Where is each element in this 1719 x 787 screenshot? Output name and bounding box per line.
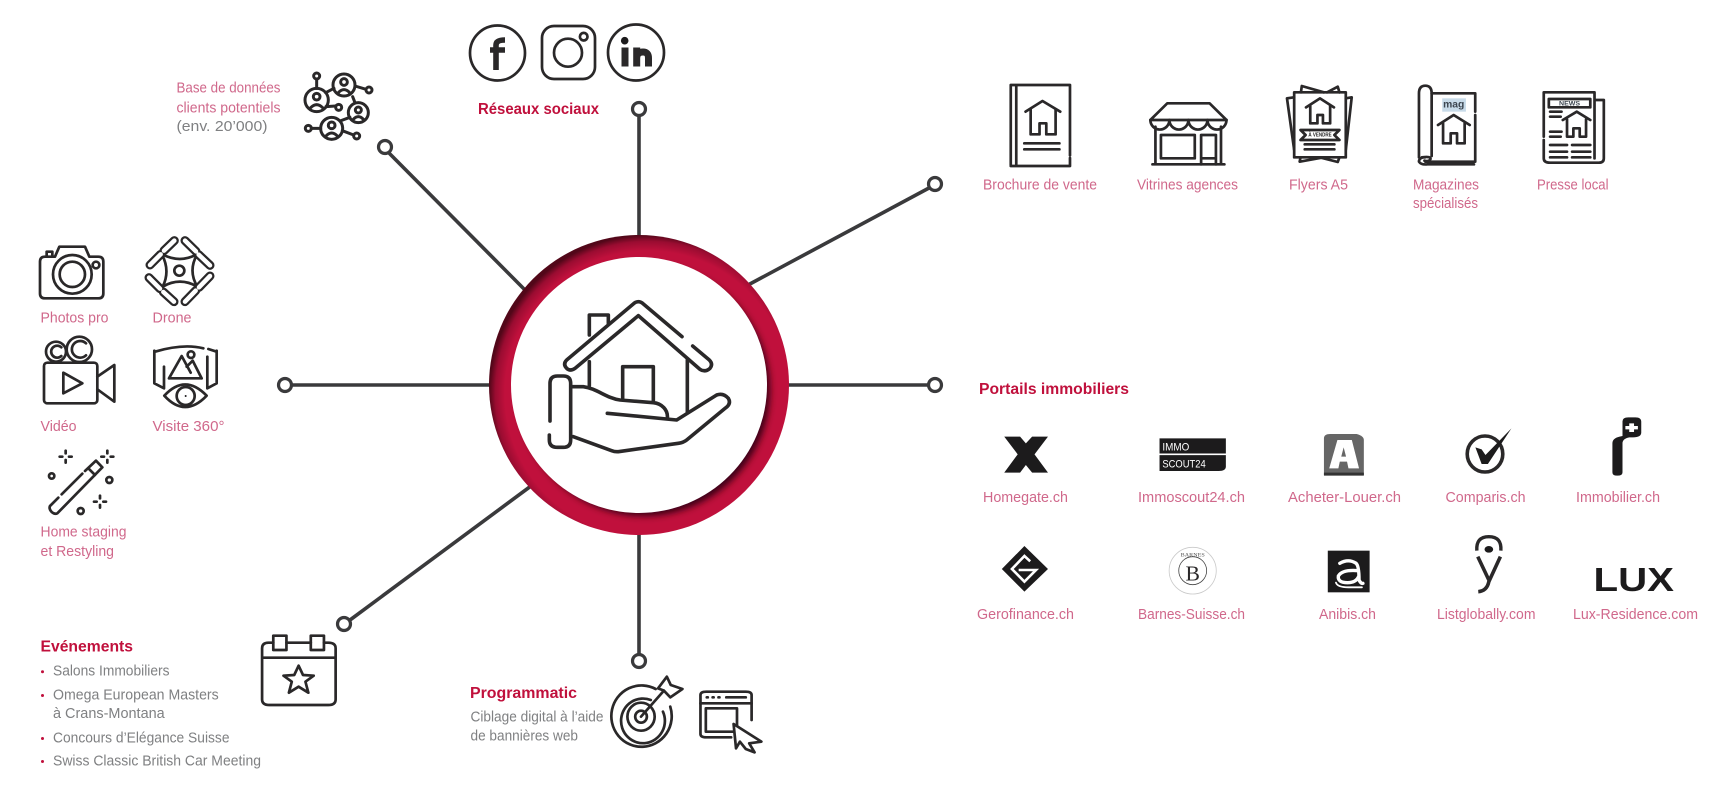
connector end dots	[278, 102, 942, 668]
label: magazines: Magazines	[1413, 178, 1479, 194]
icon: facebook	[470, 26, 525, 80]
connector lines	[292, 115, 929, 654]
list: événements: Omega European Masters	[53, 687, 219, 703]
label: homegate: Homegate.ch	[983, 490, 1068, 506]
logo: listglobally	[1477, 537, 1501, 592]
logo: barnes: B	[1185, 561, 1200, 585]
panel: base de données	[176, 73, 372, 139]
panel: événements	[40, 636, 336, 770]
icon: presse	[1544, 92, 1604, 163]
icon: target with arrow	[611, 677, 682, 747]
heading: programmatic: Programmatic	[470, 685, 577, 702]
text: base de données: (env. 20’000)	[176, 119, 268, 135]
icon: video	[44, 337, 114, 403]
label: acheter-louer: Acheter-Louer.ch	[1288, 490, 1401, 506]
panel: visuels	[40, 241, 224, 560]
label: vitrines: Vitrines agences	[1137, 178, 1238, 194]
icon: house in hand	[549, 302, 729, 452]
logo: barnes: BARNES	[1181, 553, 1205, 558]
label: photos: Photos pro	[40, 311, 108, 327]
label: immoscout24: Immoscout24.ch	[1138, 490, 1245, 506]
label: magazines	[1413, 178, 1479, 212]
label: video: Vidéo	[40, 419, 76, 435]
text: programmatic description: Ciblage digital à l’aide	[470, 710, 604, 726]
logo: anibis	[1328, 551, 1370, 592]
icon: magic wand	[49, 451, 113, 514]
text: base de données: clients potentiels	[176, 101, 280, 117]
icon: magazine: mag	[1443, 100, 1464, 110]
icon: flyers: À VENDRE	[1308, 132, 1332, 138]
panel: programmatic	[470, 677, 761, 752]
text: base de données	[176, 81, 280, 135]
list: événements: Swiss Classic British Car Meeting	[53, 754, 261, 770]
logo: immoscout24: SCOUT24	[1162, 458, 1206, 470]
icon: camera	[40, 247, 103, 298]
label: flyers: Flyers A5	[1289, 178, 1348, 194]
label: anibis: Anibis.ch	[1319, 607, 1376, 623]
list: événements: Concours d’Elégance Suisse	[53, 730, 230, 746]
panel: portails immobiliers	[977, 381, 1698, 623]
label: barnes: Barnes-Suisse.ch	[1138, 607, 1245, 623]
label: listglobally: Listglobally.com	[1437, 607, 1536, 623]
list: événements: à Crans-Montana	[53, 706, 166, 722]
label: gerofinance: Gerofinance.ch	[977, 607, 1074, 623]
label: home staging: Home staging	[40, 525, 126, 541]
icon: presse: NEWS	[1559, 101, 1581, 107]
label: visite 360: Visite 360°	[152, 419, 224, 435]
text: programmatic description: de bannières web	[470, 729, 578, 745]
logo: acheter-louer	[1324, 434, 1364, 476]
icon: visite 360	[154, 346, 217, 407]
icon: drone	[149, 241, 210, 302]
list: événements	[41, 664, 261, 770]
label: comparis: Comparis.ch	[1446, 490, 1526, 506]
label: lux-residence: Lux-Residence.com	[1573, 607, 1698, 623]
label: brochure: Brochure de vente	[983, 178, 1097, 194]
label: home staging: et Restyling	[40, 544, 114, 560]
icon: network of clients	[305, 73, 372, 139]
heading: événements: Evénements	[40, 639, 133, 656]
logo: immoscout24: IMMO	[1162, 441, 1189, 453]
logo: gerofinance	[1002, 546, 1048, 592]
logo: immoscout24	[1160, 438, 1226, 471]
heading: réseaux sociaux: Réseaux sociaux	[478, 101, 599, 118]
label: presse: Presse local	[1537, 178, 1608, 194]
logo: homegate	[1004, 437, 1048, 473]
logo: lux: LUX	[1594, 561, 1674, 598]
icon: vitrine	[1150, 103, 1226, 164]
logo: comparis	[1467, 428, 1511, 472]
icon: calendar with star	[262, 636, 336, 705]
text: programmatic description	[470, 710, 604, 745]
icon: browser with cursor	[700, 692, 761, 752]
label: home staging	[40, 525, 126, 560]
icon: brochure	[1011, 85, 1070, 166]
panel: réseaux sociaux	[470, 24, 664, 118]
icon: flyers	[1287, 86, 1352, 162]
icon: linkedin	[608, 24, 664, 80]
icon: instagram	[542, 26, 595, 79]
label: magazines: spécialisés	[1413, 196, 1478, 212]
panel: supports print	[983, 85, 1608, 212]
label: drone: Drone	[152, 311, 192, 327]
logo: immobilier	[1612, 417, 1641, 476]
central ring	[489, 235, 789, 535]
logo: barnes	[1169, 547, 1216, 594]
heading: portails immobiliers: Portails immobiliers	[979, 381, 1129, 398]
label: immobilier: Immobilier.ch	[1576, 490, 1660, 506]
icon: magazine	[1419, 86, 1475, 164]
list: événements: Salons Immobiliers	[53, 664, 170, 680]
text: base de données: Base de données	[176, 81, 280, 97]
